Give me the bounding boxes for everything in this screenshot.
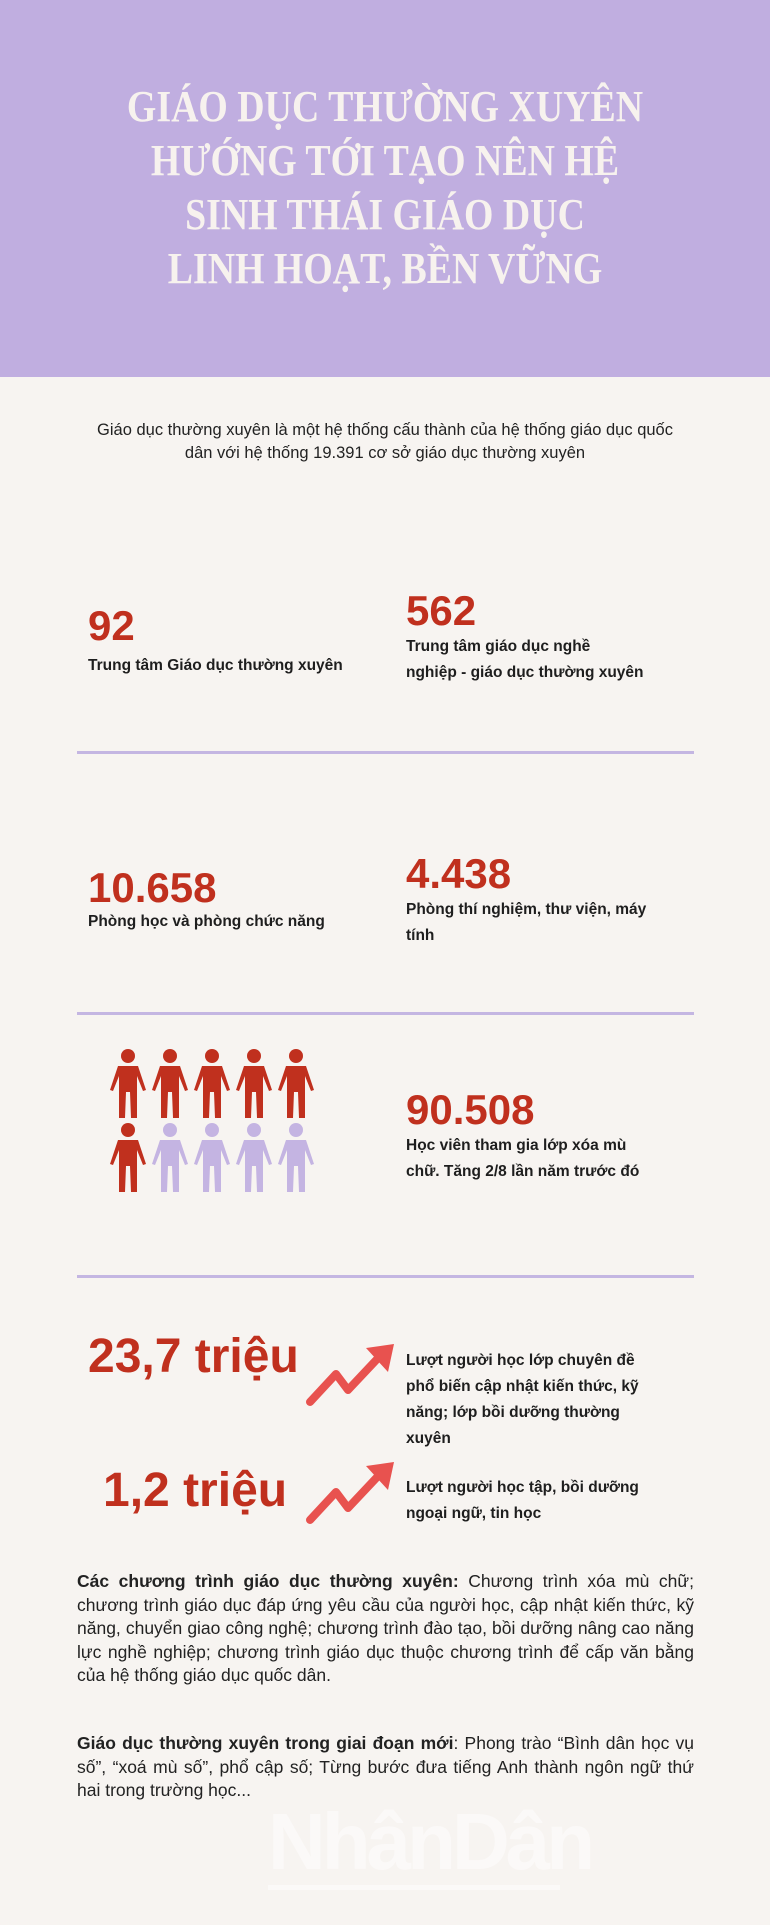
stat: 562: nghiệp - giáo dục thường xuyên bbox=[406, 664, 644, 681]
stat: 10.658: 10.658 bbox=[88, 864, 216, 911]
label 23,7 bbox=[406, 1352, 639, 1447]
stat: 1,2 triệu: 1,2 triệu bbox=[103, 1464, 287, 1517]
stat: 10.658 bbox=[88, 864, 325, 930]
icon: people pictogram bbox=[110, 1049, 314, 1192]
title: LINH HOẠT, BỀN VỮNG bbox=[168, 244, 602, 293]
icon: arrow up 2 bbox=[306, 1462, 394, 1524]
label 23,7: xuyên bbox=[406, 1430, 451, 1447]
stat: 92: Trung tâm Giáo dục thường xuyên bbox=[88, 657, 343, 674]
stat: 4.438: Phòng thí nghiệm, thư viện, máy bbox=[406, 901, 646, 918]
intro text: dân với hệ thống 19.391 cơ sở giáo dục thường xuyên bbox=[185, 444, 585, 462]
stat: 562 bbox=[406, 587, 644, 681]
stat: 4.438: tính bbox=[406, 927, 434, 944]
stat: 562: Trung tâm giáo dục nghề bbox=[406, 638, 590, 655]
watermark: NhânDân bbox=[268, 1797, 591, 1886]
stat: 90.508: 90.508 bbox=[406, 1086, 534, 1133]
label 1,2 bbox=[406, 1479, 639, 1522]
stat: 92: 92 bbox=[88, 602, 135, 649]
label 23,7: phổ biến cập nhật kiến thức, kỹ bbox=[406, 1378, 639, 1395]
paragraph: programs: Các chương trình giáo dục thường xuyên: Chương trình xóa mù chữ; chương trình giáo dục đáp ứng yêu cầu của người học, cập nhật kiến thức, kỹ năng, chuyển giao công nghệ; chương trình đào tạo, bồi dưỡng nâng cao năng lực nghề nghiệp; chương trình giáo dục thuộc chương trình để cấp văn bằng của hệ thống giáo dục quốc dân. bbox=[77, 1571, 694, 1685]
stat: 10.658: Phòng học và phòng chức năng bbox=[88, 913, 325, 930]
label 23,7: năng; lớp bồi dưỡng thường bbox=[406, 1404, 620, 1421]
header panel bbox=[0, 0, 770, 377]
stat: 90.508 bbox=[406, 1086, 639, 1180]
label 23,7: Lượt người học lớp chuyên đề bbox=[406, 1352, 635, 1369]
title: SINH THÁI GIÁO DỤC bbox=[185, 190, 585, 239]
stat: 92 bbox=[88, 602, 343, 674]
title: GIÁO DỤC THƯỜNG XUYÊN bbox=[127, 82, 643, 131]
label 1,2: Lượt người học tập, bồi dưỡng bbox=[406, 1479, 639, 1496]
intro text: Giáo dục thường xuyên là một hệ thống cấu thành của hệ thống giáo dục quốc bbox=[97, 421, 673, 439]
stat: 90.508: chữ. Tăng 2/8 lần năm trước đó bbox=[406, 1163, 639, 1180]
intro text bbox=[97, 421, 673, 462]
icon: arrow up 1 bbox=[306, 1344, 394, 1406]
stat: 562: 562 bbox=[406, 587, 476, 634]
label 1,2: ngoại ngữ, tin học bbox=[406, 1505, 541, 1522]
title: HƯỚNG TỚI TẠO NÊN HỆ bbox=[151, 136, 619, 185]
stat: 90.508: Học viên tham gia lớp xóa mù bbox=[406, 1137, 626, 1154]
paragraph: new period: Giáo dục thường xuyên trong giai đoạn mới: Phong trào “Bình dân học vụ số”, “xoá mù số”, phổ cập số; Từng bước đưa tiếng Anh thành ngôn ngữ thứ hai trong trường học... bbox=[77, 1733, 694, 1800]
stat: 23,7 triệu: 23,7 triệu bbox=[88, 1330, 299, 1383]
stat: 4.438 bbox=[406, 850, 646, 944]
stat: 4.438: 4.438 bbox=[406, 850, 511, 897]
title bbox=[127, 82, 643, 293]
